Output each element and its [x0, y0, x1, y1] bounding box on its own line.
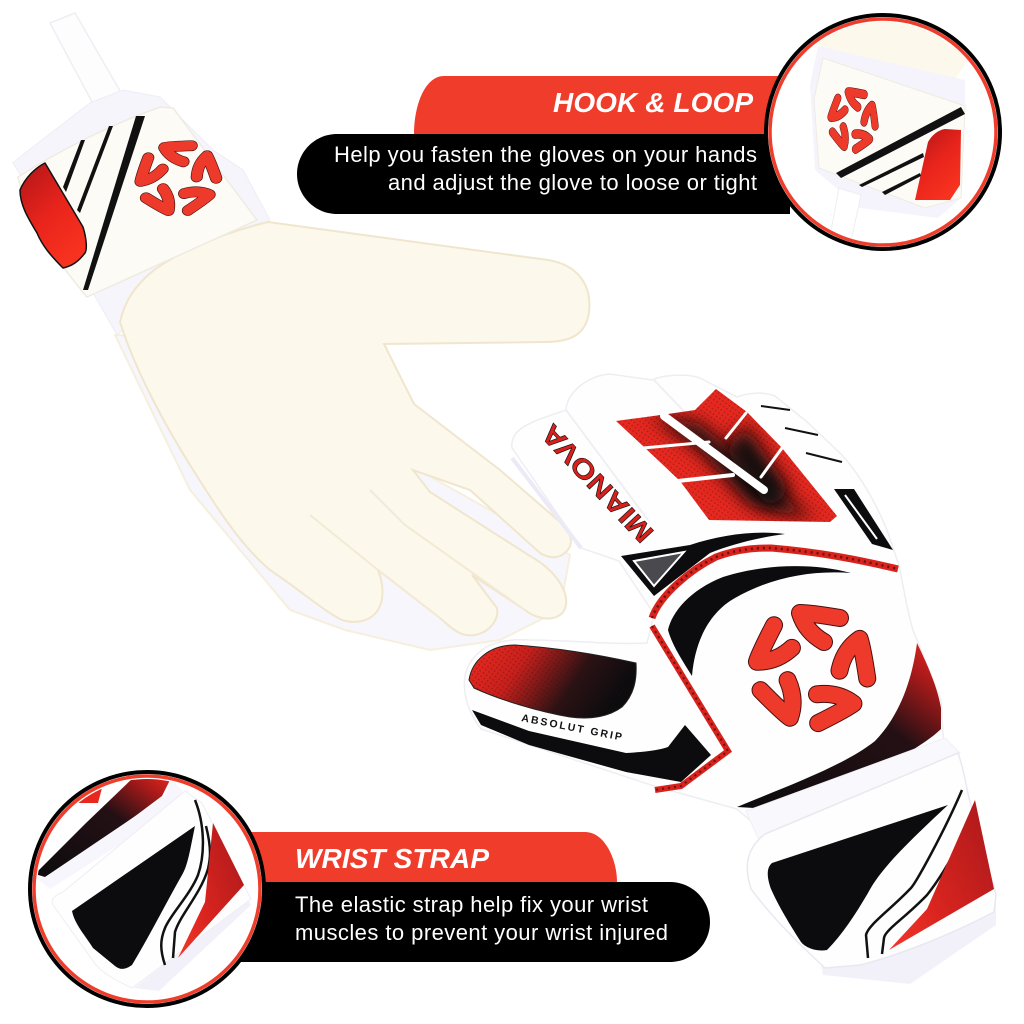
thumb black strip: [472, 710, 711, 782]
thumb red panel: [469, 645, 636, 718]
latex palm and fingers: [120, 222, 589, 635]
brand name: MIANOVA: [535, 418, 659, 548]
description text: and adjust the glove to loose or tight: [388, 170, 757, 195]
heading text: HOOK & LOOP: [553, 87, 753, 118]
lower back swoosh: [737, 643, 941, 809]
cuff stripes: [866, 790, 972, 958]
side lining: [512, 458, 581, 548]
knuckle swoosh: [621, 533, 785, 596]
callout: wrist strap: [30, 772, 710, 1006]
finger panel: [616, 389, 837, 522]
heading text: WRIST STRAP: [295, 843, 489, 874]
main logo: [757, 613, 872, 727]
right glove (back side): [464, 374, 996, 984]
heading pill: [240, 832, 617, 882]
little finger dashes: [761, 406, 842, 462]
cuff red wedge: [889, 800, 994, 950]
finger panel white lines: [643, 413, 782, 490]
red mesh stripe upper: [652, 548, 898, 618]
cuff black panel: [768, 805, 948, 950]
detail circle: cuff close-up: [766, 15, 1000, 249]
cuff stripes: [63, 116, 145, 290]
description text: muscles to prevent your wrist injured: [295, 920, 668, 945]
description text: Help you fasten the gloves on your hands: [334, 142, 757, 167]
black crescent: [668, 566, 851, 676]
cuff logo: [135, 139, 224, 220]
palm lining: [115, 335, 570, 650]
cuff panel: [747, 753, 996, 968]
black triangle side panel: [834, 489, 893, 550]
callout: hook and loop: [297, 15, 1000, 249]
glove body: [464, 374, 944, 827]
elastic wrist band: [746, 738, 960, 838]
description text: The elastic strap help fix your wrist: [295, 892, 648, 917]
description text: [334, 142, 757, 195]
finger seams: [310, 490, 525, 618]
description pill: [297, 134, 790, 214]
finger crease lines: [566, 380, 740, 520]
detail circle: wrist strap close-up: [30, 772, 264, 1006]
left glove (palm side): [13, 13, 589, 650]
wrist lining: [13, 90, 270, 335]
heading pill: [414, 76, 790, 134]
cuff lining: [820, 900, 996, 984]
description pill: [240, 882, 710, 962]
red mesh stripe lower: [652, 626, 728, 790]
cuff red panel: [20, 163, 86, 268]
description text: [295, 892, 668, 945]
cuff panel: [18, 107, 257, 297]
thumb label: ABSOLUT GRIP: [520, 712, 623, 743]
hook and loop tab: [50, 13, 127, 117]
